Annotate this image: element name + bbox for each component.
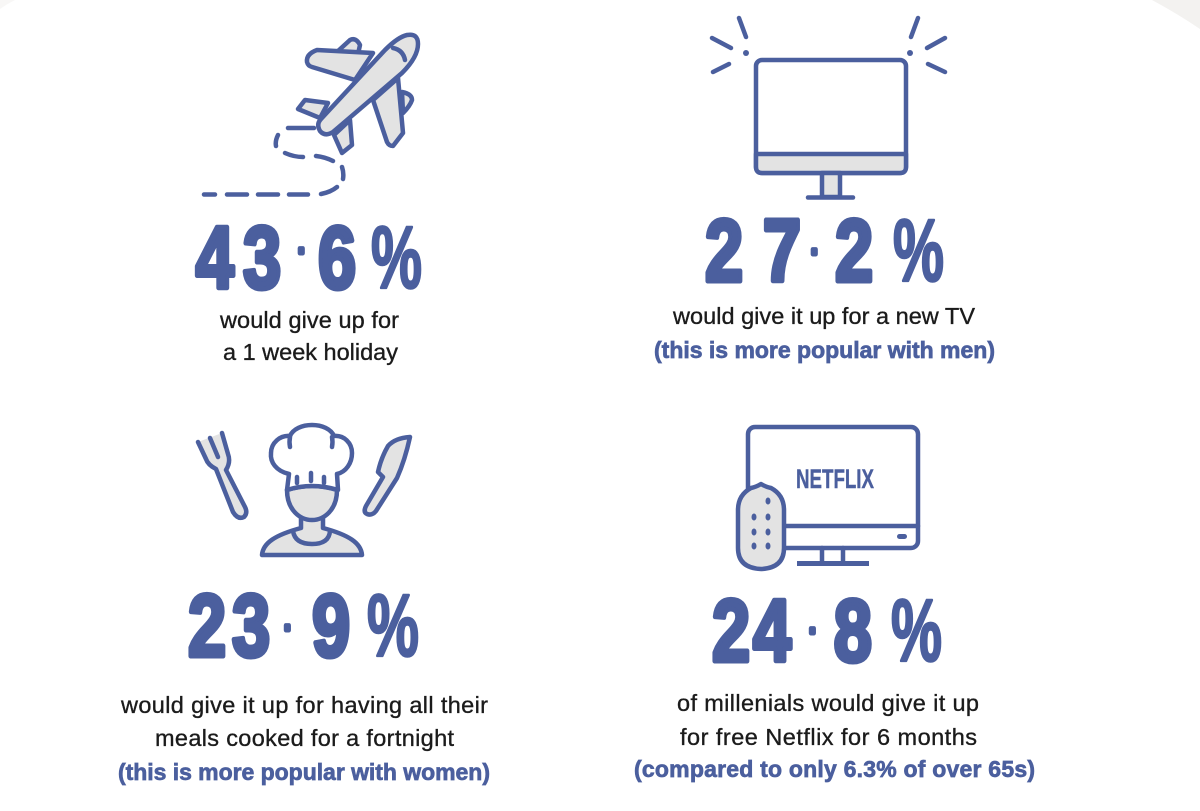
icon: television with Netflix and remote	[738, 427, 918, 569]
stat: 24.8 percent: 2	[712, 582, 750, 680]
stat: 24.8 percent: 4	[753, 582, 791, 680]
panel: Netflix	[634, 427, 1035, 782]
stat: 23.9 percent	[188, 576, 419, 675]
background corner shape left	[0, 0, 15, 9]
caption: holiday	[219, 307, 399, 365]
icon: airplane with dashed flight path	[204, 35, 418, 194]
caption: new TV: would give it up for a new TV	[672, 303, 975, 329]
stat: 24.8 percent	[712, 581, 942, 680]
caption: Netflix: (compared to only 6.3% of over 65s)	[634, 756, 1035, 782]
stat: 27.2 percent: 2	[835, 202, 873, 300]
stat: 43.6 percent: 6	[318, 209, 356, 307]
stat: 43.6 percent: 4	[196, 209, 234, 307]
caption: new TV: (this is more popular with men)	[654, 337, 995, 363]
stat: 27.2 percent: 7	[763, 202, 801, 300]
stat: 23.9 percent: 2	[188, 577, 226, 675]
stat: 24.8 percent: %	[891, 581, 942, 680]
panel: new TV	[654, 18, 995, 363]
stat: 43.6 percent	[196, 208, 422, 307]
stat: 27.2 percent: 2	[705, 202, 743, 300]
caption: Netflix: of millenials would give it up	[677, 690, 979, 716]
caption: holiday: would give up for	[219, 307, 399, 333]
caption: Netflix	[634, 690, 1035, 782]
stat: 24.8 percent: 8	[834, 582, 872, 680]
stat: 43.6 percent: ·	[298, 234, 306, 267]
caption: new TV	[654, 303, 995, 363]
panel: holiday	[196, 35, 422, 365]
stat: 43.6 percent: %	[371, 208, 422, 307]
stat: 23.9 percent: ·	[284, 611, 292, 644]
stat: 23.9 percent: 3	[232, 577, 270, 675]
icon: chef with fork and knife	[198, 425, 410, 555]
caption: cooked meals: would give it up for having all their	[120, 692, 488, 718]
caption: cooked meals	[118, 692, 490, 785]
caption: cooked meals: meals cooked for a fortnight	[155, 725, 454, 751]
background corner shape right	[1152, 0, 1200, 29]
stat: 27.2 percent	[705, 201, 944, 300]
stat: 23.9 percent: 9	[312, 577, 350, 675]
panel: cooked meals	[118, 425, 490, 785]
caption: Netflix: for free Netflix for 6 months	[680, 724, 977, 750]
stat: 27.2 percent: %	[893, 201, 944, 300]
stat: 23.9 percent: %	[367, 576, 419, 675]
stat: 24.8 percent: ·	[809, 614, 817, 647]
stat: 43.6 percent: 3	[243, 209, 281, 307]
stat: 27.2 percent: ·	[811, 235, 819, 268]
caption: cooked meals: (this is more popular with women)	[118, 759, 490, 785]
icon: television with Netflix and remote: NETFLIX	[796, 464, 874, 494]
icon: monitor with shine rays	[712, 18, 945, 198]
caption: holiday: a 1 week holiday	[223, 339, 398, 365]
